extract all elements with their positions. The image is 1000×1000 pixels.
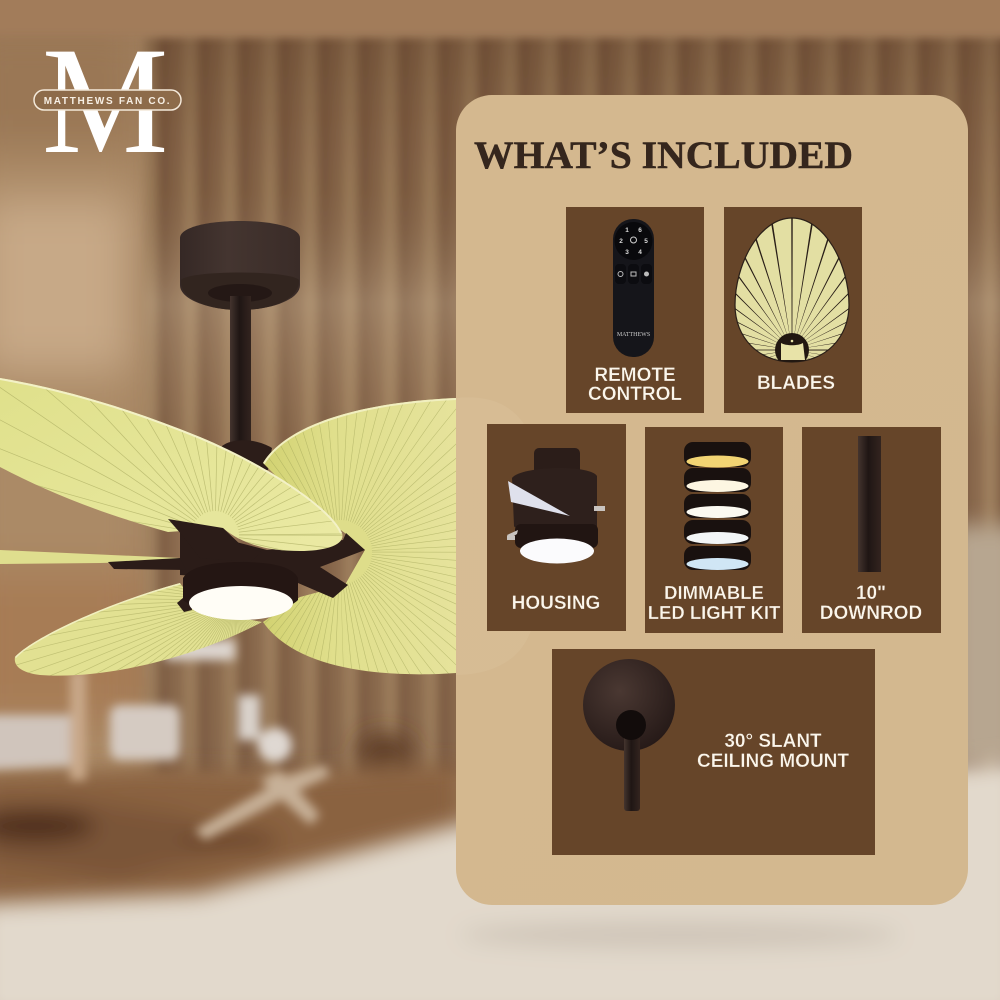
card: dimmable LED light kit — [645, 427, 783, 633]
hub arm: left — [168, 519, 262, 562]
hub arm: right — [180, 530, 365, 598]
blade: upper left — [0, 378, 342, 551]
motor top — [222, 440, 272, 470]
logo badge: MATTHEWS FAN CO. — [44, 96, 171, 107]
label: HOUSING — [512, 593, 600, 614]
light housing — [183, 562, 298, 614]
icon: downrod — [858, 436, 881, 572]
icon: remote: 5 — [644, 238, 648, 245]
logo monogram: M — [42, 15, 168, 185]
label — [820, 583, 922, 624]
fan downrod — [230, 296, 251, 446]
faint blade reflection — [456, 397, 545, 675]
icon: remote: 6 — [638, 227, 642, 234]
label: DOWNROD — [820, 603, 922, 624]
icon: remote — [613, 219, 654, 357]
label — [588, 365, 682, 405]
icon: LED discs — [684, 442, 751, 570]
blade: far left — [0, 550, 180, 564]
logo badge — [34, 90, 181, 110]
blade: right — [263, 398, 456, 674]
card: downrod — [802, 427, 941, 633]
card: remote control — [566, 207, 704, 413]
logo — [34, 15, 181, 185]
icon: remote: 3 — [625, 249, 629, 256]
label: REMOTE — [594, 365, 676, 386]
card: slant ceiling mount — [552, 649, 875, 855]
hub arm: lower left — [177, 592, 192, 612]
panel: what's included — [456, 95, 968, 905]
hub arm: far left — [108, 558, 186, 570]
ceiling fan — [0, 221, 540, 800]
label — [648, 582, 781, 623]
label: DIMMABLE — [664, 582, 764, 603]
label: BLADES — [757, 373, 835, 394]
label: LED LIGHT KIT — [648, 602, 781, 623]
label: CONTROL — [588, 384, 682, 405]
icon: housing — [507, 448, 605, 564]
icon: palm blade — [734, 217, 850, 363]
icon: remote: 4 — [638, 249, 642, 256]
icon: remote: 2 — [619, 238, 623, 245]
blade: lower left — [14, 583, 262, 676]
heading: WHAT’S INCLUDED — [474, 134, 853, 177]
card: housing — [487, 424, 626, 631]
LED light — [189, 586, 293, 620]
icon: slant mount — [583, 659, 675, 811]
wood slats — [145, 36, 1000, 776]
icon: remote: MATTHEWS — [617, 332, 650, 338]
label: CEILING MOUNT — [697, 751, 849, 772]
label — [697, 731, 849, 772]
fan canopy — [180, 221, 300, 310]
icon: remote: 1 — [625, 227, 629, 234]
label: 30° SLANT — [724, 731, 822, 752]
card: blades — [724, 207, 862, 413]
label: 10" — [856, 583, 886, 604]
